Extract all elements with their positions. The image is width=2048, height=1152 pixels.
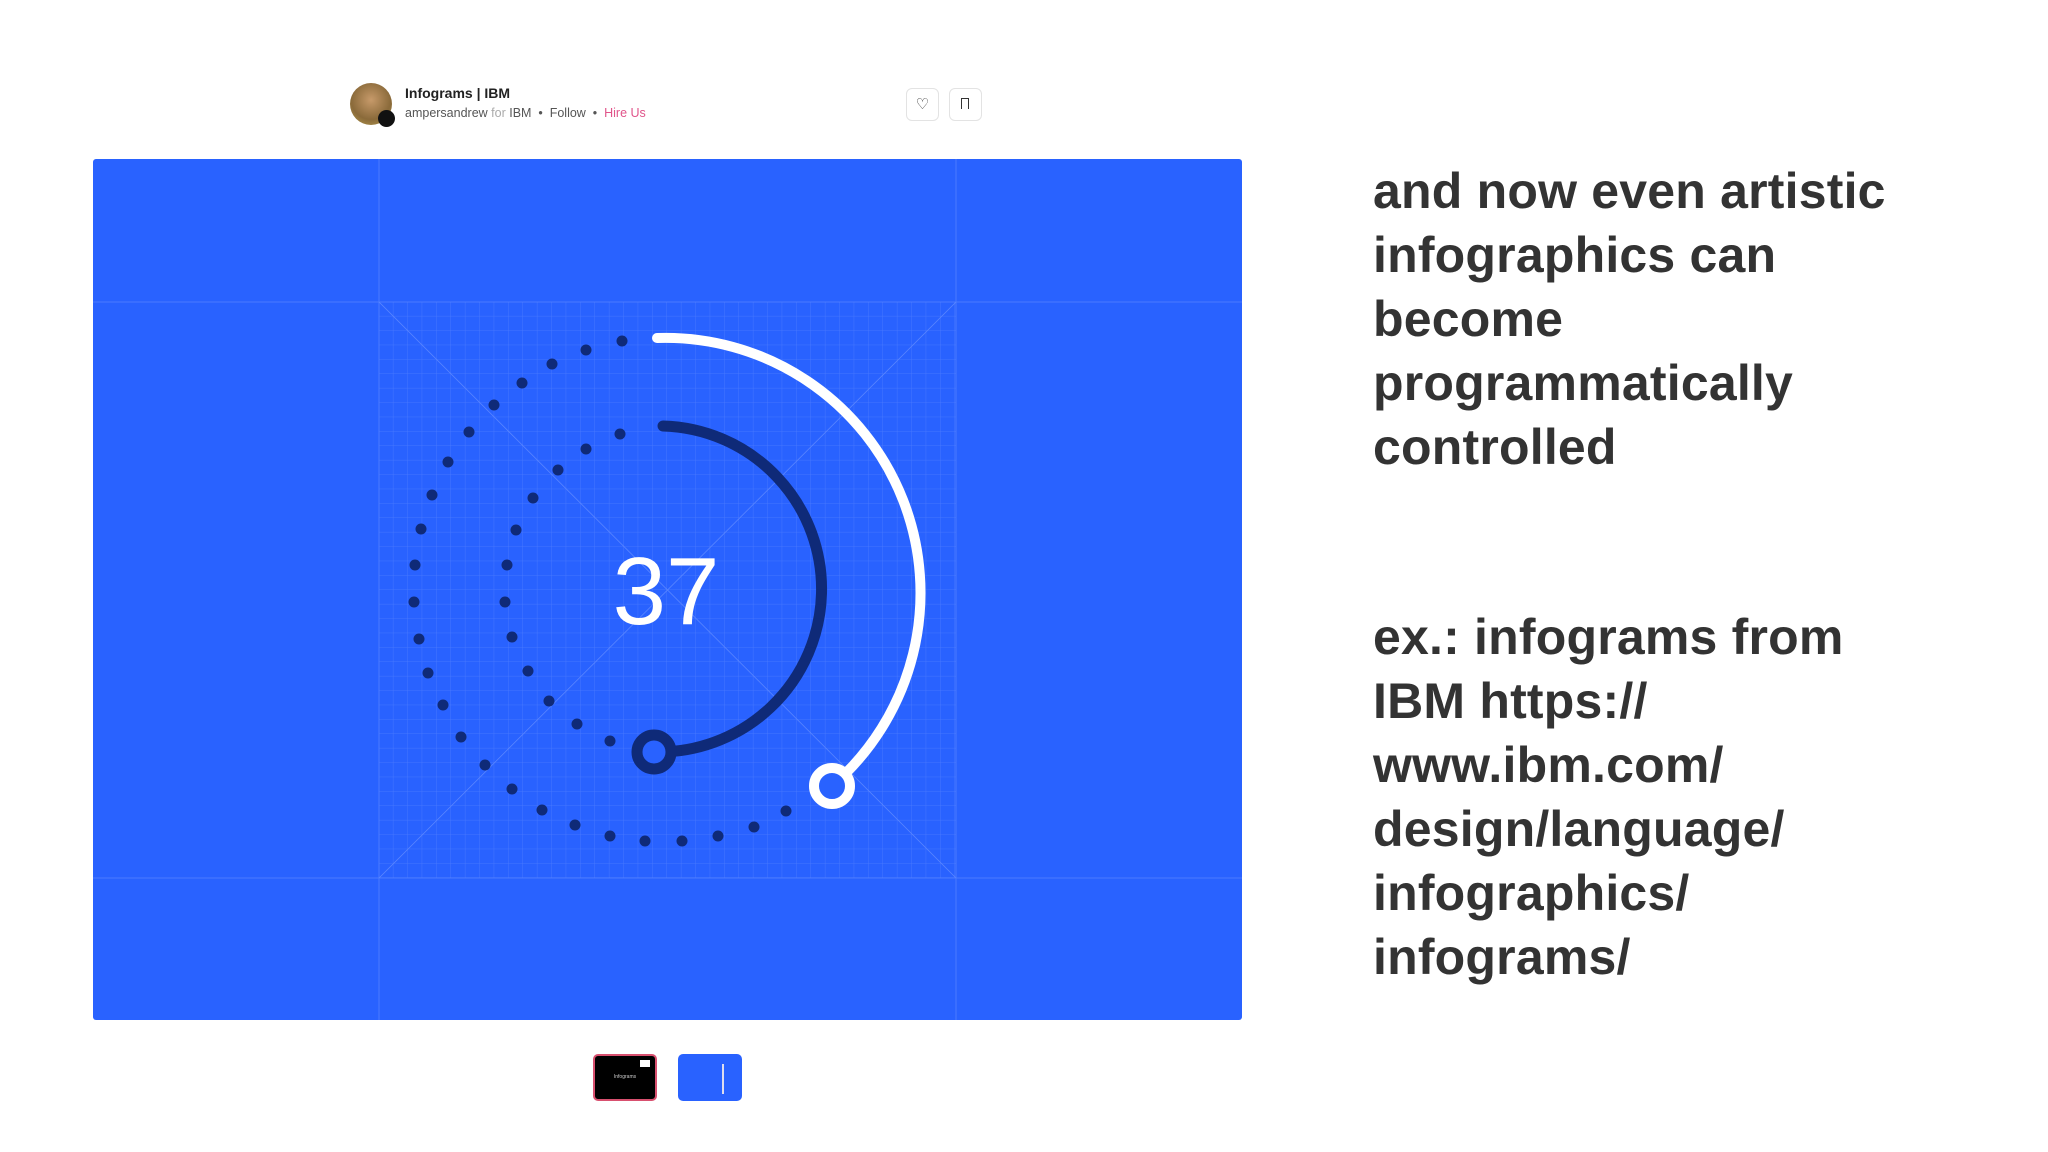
dark end marker (637, 735, 671, 769)
white progress arc (657, 338, 921, 786)
value label: 37 (613, 538, 719, 645)
text block: example link: design/language/ (1373, 801, 1785, 857)
thumbnail: blue chart (678, 1054, 742, 1101)
text block: example link (1372, 609, 1844, 985)
header: author bar (350, 83, 982, 127)
text block: example link: IBM https:// (1373, 673, 1648, 729)
text block: main statement: controlled (1373, 419, 1617, 475)
dark inner arc (654, 426, 822, 752)
title text: Infograms | IBM (405, 85, 510, 101)
text block: main statement: infographics can (1373, 227, 1776, 283)
text block: example link: infographics/ (1373, 865, 1690, 921)
white end marker (814, 768, 850, 804)
inner dotted ring (500, 428, 626, 746)
text block: main statement: become (1373, 291, 1563, 347)
icon: heart button (906, 88, 939, 121)
thumbnail: video: Infograms (614, 1074, 636, 1080)
icon: avatar (350, 83, 392, 125)
byline: ampersandrew for IBM • Follow • Hire Us (405, 106, 646, 120)
text block: example link: infograms/ (1373, 929, 1631, 985)
icon: bookmark button (949, 88, 982, 121)
panel: blue infogram (93, 159, 1242, 1020)
text block: main statement (1373, 163, 1886, 475)
outer dotted ring (408, 336, 792, 846)
thumbnail: video (593, 1054, 657, 1101)
text block: main statement: and now even artistic (1373, 163, 1886, 219)
icon: heart button: ♡ (916, 96, 929, 113)
text block: main statement: programmatically (1373, 355, 1793, 411)
text block: example link: ex.: infograms from (1373, 609, 1844, 665)
text block: example link: www.ibm.com/ (1373, 737, 1724, 793)
